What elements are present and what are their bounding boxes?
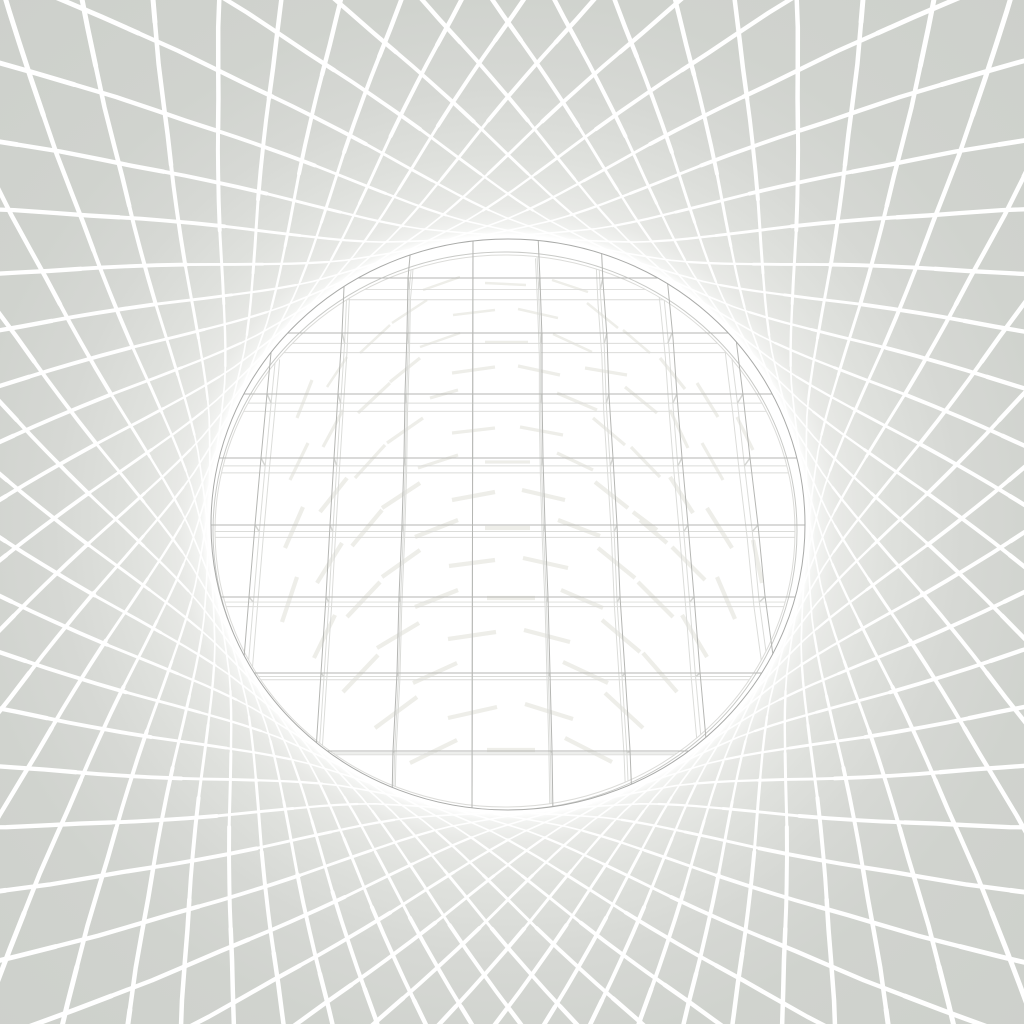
inner rim arcs [213, 252, 797, 810]
circle outline [211, 239, 805, 810]
junction connectors [249, 278, 765, 753]
dark front grid [200, 235, 820, 815]
arc dashes [282, 277, 762, 763]
white halo around circle [209, 237, 807, 812]
light back grid [205, 247, 813, 816]
panel: circle interior grid [200, 235, 820, 816]
